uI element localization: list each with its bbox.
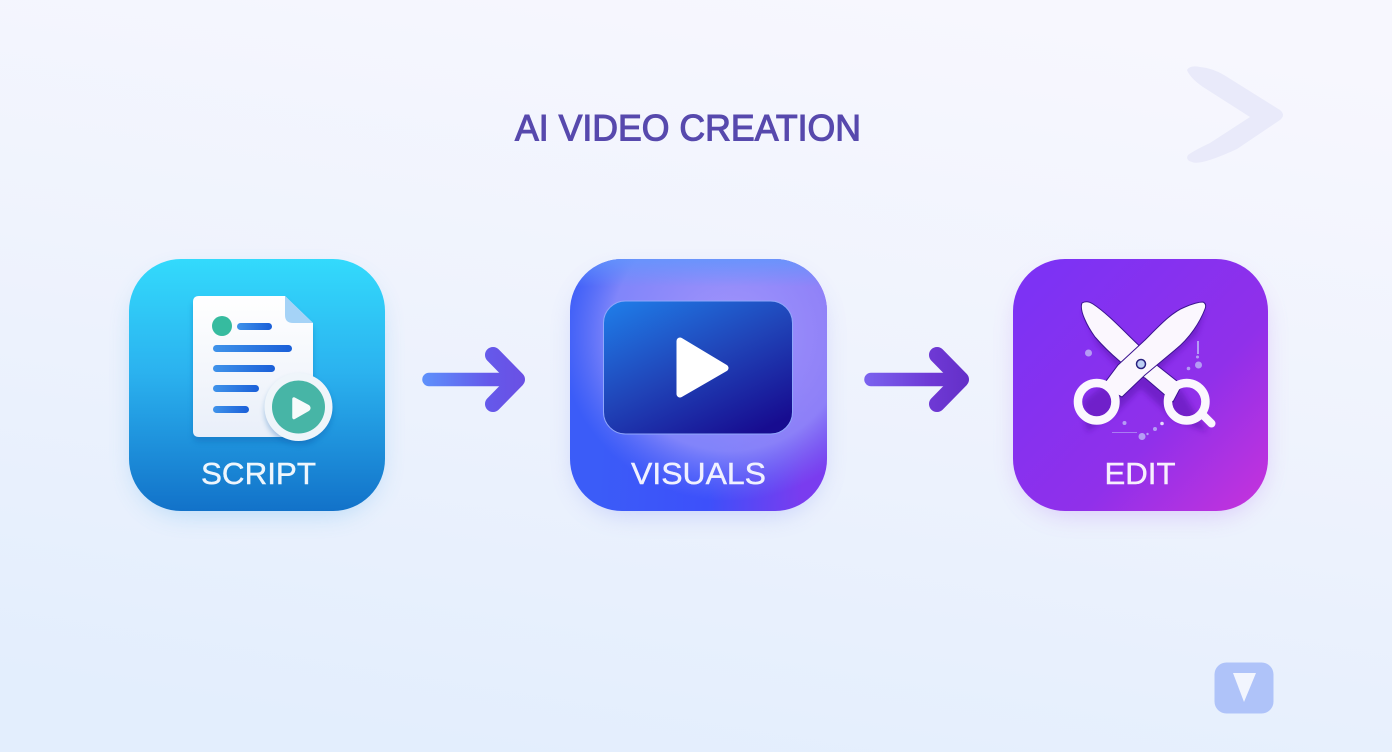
icon: scissors [1078, 302, 1212, 440]
scissor pivot [1136, 360, 1146, 368]
icon: video screen with play button [604, 301, 792, 434]
scissor blade back [1081, 302, 1182, 402]
decorative chevron top right [1187, 66, 1283, 163]
panel: script [129, 259, 385, 513]
sparkle dots [1085, 341, 1202, 440]
badge: bottom right down triangle [1214, 662, 1274, 714]
scissor left ring [1078, 383, 1115, 420]
panel: edit [1013, 259, 1268, 513]
scissor right ring [1168, 383, 1212, 424]
scissor blade front [1103, 302, 1206, 397]
label: edit: EDIT [1104, 457, 1176, 491]
label: script: SCRIPT [201, 457, 316, 491]
panel: visuals [570, 259, 827, 513]
label: visuals: VISUALS [631, 457, 766, 491]
arrow: visuals to edit [871, 355, 961, 404]
icon: script document with play badge [193, 296, 333, 445]
title: AI VIDEO CREATION [515, 108, 861, 148]
arrow: script to visuals [429, 355, 517, 404]
